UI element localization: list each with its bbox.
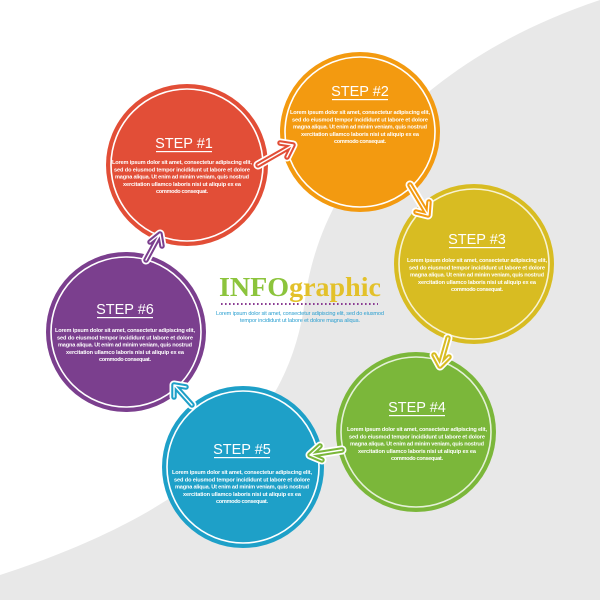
heading: step 6: STEP #6 [96, 302, 154, 318]
text block: subtitle: tempor incididunt ut labore et dolore magna aliqua. [240, 318, 360, 324]
heading: step 5: STEP #5 [213, 442, 271, 458]
panel: step 2 [280, 52, 440, 212]
arrow: 4 to 5 [310, 446, 342, 460]
arrow: 6 to 1 [146, 234, 162, 260]
panel: step 3 [394, 184, 554, 344]
text block: step 5 [172, 470, 312, 505]
panel: step 1 [106, 84, 268, 246]
arrow: 2 to 3 [410, 185, 429, 215]
arrow: 1 to 2 [258, 143, 293, 165]
text block: subtitle [216, 311, 384, 324]
heading: step 2: STEP #2 [331, 84, 389, 100]
panel: step 4 [336, 352, 496, 512]
heading: step 4: STEP #4 [388, 400, 446, 416]
text block: step 4 [347, 427, 487, 462]
text block: step 3 [407, 258, 547, 293]
text block: step 6 [55, 328, 195, 363]
title: INFOgraphic: INFOgraphic [219, 272, 381, 302]
text block: subtitle: Lorem ipsum dolor sit amet, consectetur adipiscing elit, sed do eiusmod [216, 311, 384, 317]
panel: step 6 [46, 252, 206, 412]
panel: step 5 [162, 386, 324, 548]
heading: step 3: STEP #3 [448, 232, 506, 248]
arrow: 5 to 6 [174, 385, 192, 405]
arrow: 3 to 4 [434, 338, 449, 366]
text block: step 1 [112, 160, 252, 195]
text block: step 2 [290, 110, 430, 145]
heading: step 1: STEP #1 [155, 136, 213, 152]
